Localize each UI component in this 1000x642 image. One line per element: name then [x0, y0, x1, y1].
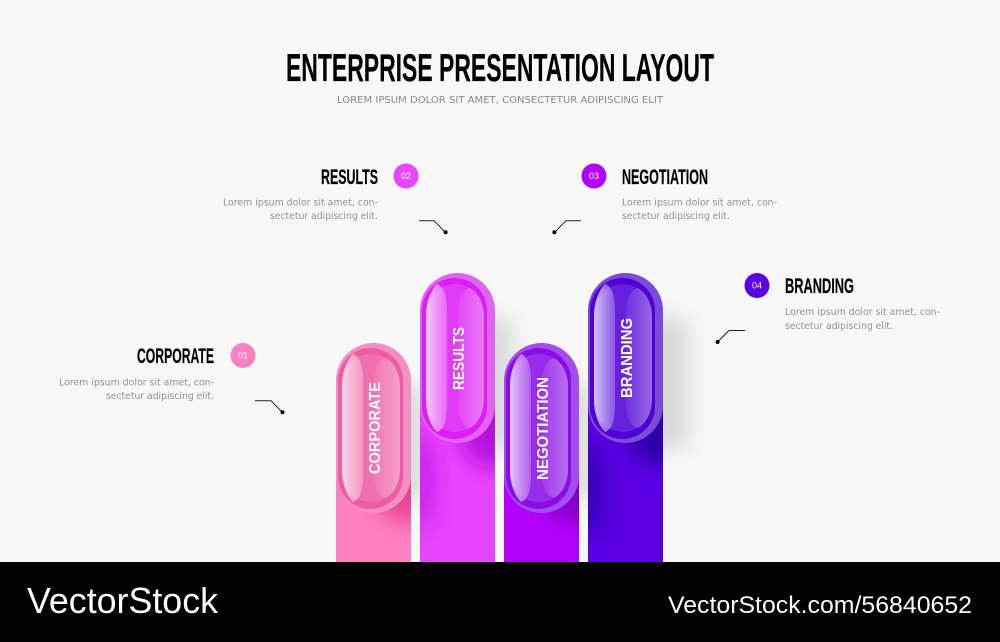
number badge 03: 03	[589, 171, 599, 181]
footer brand: VectorStock	[27, 580, 219, 621]
capsule: results	[420, 273, 495, 443]
number badge 02: 02	[401, 171, 411, 181]
description: Lorem ipsum dolor sit amet, con-	[59, 378, 214, 388]
description: Lorem ipsum dolor sit amet, con-	[622, 198, 777, 208]
footer band	[0, 562, 1000, 642]
number badge 04	[744, 273, 770, 298]
number badge 02	[394, 164, 418, 188]
description	[59, 378, 214, 402]
callout: negotiation: NEGOTIATION	[622, 166, 708, 189]
bar: negotiation	[504, 343, 579, 562]
description: Lorem ipsum dolor sit amet, con-	[785, 307, 940, 318]
capsule: branding	[588, 273, 663, 443]
bar: branding	[588, 273, 663, 562]
label: negotiation: NEGOTIATION	[535, 377, 552, 480]
description	[622, 198, 777, 222]
bar: corporate	[336, 343, 411, 562]
connector	[716, 330, 745, 344]
number badge 01: 01	[238, 351, 248, 361]
footer url: VectorStock.com/56840652	[668, 592, 972, 619]
callout: negotiation	[552, 164, 777, 234]
callout: results	[223, 164, 448, 234]
description: sectetur adipiscing elit.	[785, 321, 893, 332]
number badge 03	[582, 164, 606, 188]
description: sectetur adipiscing elit.	[622, 211, 730, 222]
description: Lorem ipsum dolor sit amet, con-	[223, 198, 378, 208]
description	[223, 198, 378, 222]
soft shadows behind bars	[398, 318, 688, 500]
callout: branding: BRANDING	[785, 275, 854, 298]
label: branding: BRANDING	[619, 318, 636, 398]
description: sectetur adipiscing elit.	[106, 391, 214, 402]
number badge 04: 04	[752, 281, 762, 291]
subtitle: LOREM IPSUM DOLOR SIT AMET, CONSECTETUR ADIPISCING ELIT	[337, 95, 664, 106]
callout: corporate	[59, 343, 284, 414]
callout: results: RESULTS	[321, 166, 378, 189]
callout: branding	[716, 273, 940, 344]
connector	[552, 221, 581, 234]
title: ENTERPRISE PRESENTATION LAYOUT	[286, 47, 714, 90]
connector	[419, 221, 448, 234]
label: results: RESULTS	[451, 327, 468, 390]
description: sectetur adipiscing elit.	[270, 211, 378, 222]
bar: results	[420, 273, 495, 562]
callout: corporate: CORPORATE	[137, 345, 214, 368]
description	[785, 307, 940, 332]
number badge 01	[230, 343, 256, 368]
label: corporate: CORPORATE	[367, 382, 384, 474]
capsule: corporate	[336, 343, 411, 513]
capsule: negotiation	[504, 343, 579, 513]
connector	[255, 401, 284, 414]
